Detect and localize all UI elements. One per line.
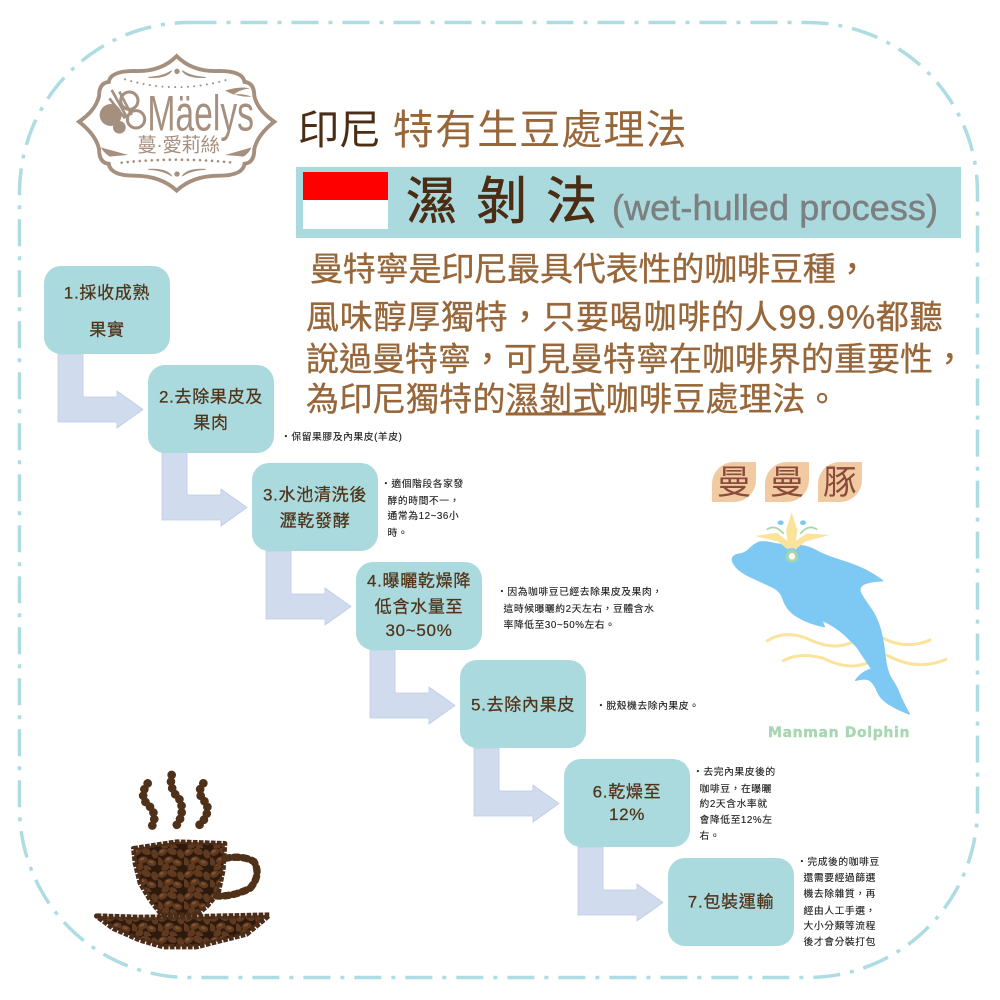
note: step 3: 酵的時間不一，: [388, 492, 460, 506]
mascot caption: Manman Dolphin: [768, 725, 910, 741]
note: step 6: 咖啡豆，在曝曬: [700, 780, 772, 794]
arrow: step 5 to 6: [474, 748, 559, 822]
step 6: [564, 759, 690, 847]
intro paragraph: 曼特寧是印尼最具代表性的咖啡豆種，: [310, 242, 868, 290]
mascot name tiles: 曼: [717, 464, 751, 502]
note: step 4: 這時候曝曬約2天左右，豆體含水: [504, 600, 654, 614]
step 7: 7.包裝運輸: [688, 892, 774, 912]
step 1: 1.採收成熟: [64, 284, 150, 302]
step 4: [356, 562, 482, 650]
step 4: 低含水量至: [375, 598, 463, 616]
note: step 7: 機去除雜質，再: [804, 886, 876, 900]
logo: Maelys badge: [76, 54, 278, 194]
note: step 4: [497, 584, 663, 631]
step 7: [668, 858, 794, 946]
logo: Maelys badge: 蔓·愛莉絲: [137, 135, 220, 157]
note: step 3: [381, 478, 464, 538]
step 3: [252, 463, 378, 551]
intro paragraph: 為印尼獨特的濕剝式咖啡豆處理法。: [306, 372, 839, 420]
note: step 4: 率降低至30~50%左右。: [504, 617, 616, 631]
mascot name tiles: 曼: [770, 464, 804, 502]
icon: coffee cup made of beans: [94, 770, 270, 950]
note: step 5: ・脫殼機去除內果皮。: [596, 698, 699, 712]
note: step 4: ・因為咖啡豆已經去除果皮及果肉，: [497, 584, 663, 598]
step 5: 5.去除內果皮: [471, 696, 575, 714]
arrow: step 6 to 7: [578, 847, 663, 921]
step 6: 12%: [609, 805, 645, 824]
arrow: step 4 to 5: [370, 650, 455, 724]
intro paragraph: [306, 242, 966, 420]
step 2: 2.去除果皮及: [159, 388, 263, 406]
step 5: [460, 660, 586, 748]
note: step 7: 還需要經過篩選: [804, 872, 876, 884]
step 4: 30~50%: [385, 621, 453, 640]
arrow: step 2 to 3: [162, 452, 247, 526]
step 1: [44, 266, 170, 354]
step 2: [148, 365, 274, 453]
note: step 7: ・完成後的咖啡豆: [797, 857, 880, 868]
note: step 6: [693, 766, 776, 842]
note: step 6: 右。: [700, 828, 720, 842]
step 4: 4.曝曬乾燥降: [367, 572, 471, 590]
step 3: 瀝乾發酵: [280, 512, 350, 530]
note: step 3: 時。: [388, 524, 408, 538]
note: step 7: 後才會分裝打包: [804, 936, 876, 948]
mascot name tiles: [712, 462, 862, 502]
title: 印尼 特有生豆處理法: [298, 107, 688, 153]
note: step 7: 經由人工手選，: [804, 902, 876, 916]
step 1: 果實: [89, 320, 125, 340]
banner: wet-hulled process: [296, 167, 961, 238]
banner heading: 濕剝法: [406, 173, 616, 230]
icon: Indonesian flag: [303, 172, 388, 229]
banner subtitle: (wet-hulled process): [612, 187, 938, 228]
mascot name tiles: 豚: [823, 464, 857, 502]
note: step 3: 通常為12~36小: [388, 511, 459, 522]
note: step 6: 約2天含水率就: [700, 799, 768, 810]
step 6: 6.乾燥至: [593, 782, 661, 802]
intro paragraph: 風味醇厚獨特，只要喝咖啡的人99.9%都聽: [306, 290, 943, 338]
intro paragraph: 說過曼特寧，可見曼特寧在咖啡界的重要性，: [306, 332, 966, 380]
step 2: 果肉: [193, 414, 229, 432]
arrow: step 3 to 4: [266, 551, 351, 625]
note: step 6: ・去完內果皮後的: [693, 767, 776, 778]
step 3: 3.水池清洗後: [263, 486, 367, 504]
arrow: step 1 to 2: [58, 354, 143, 428]
icon: dolphin mascot: [732, 512, 948, 715]
note: step 7: 大小分類等流程: [804, 921, 876, 932]
note: step 2: ・保留果膠及內果皮(羊皮): [281, 432, 402, 443]
note: step 6: 會降低至12%左: [700, 814, 773, 826]
note: step 3: ・適個階段各家發: [381, 479, 464, 490]
note: step 7: [797, 856, 880, 948]
